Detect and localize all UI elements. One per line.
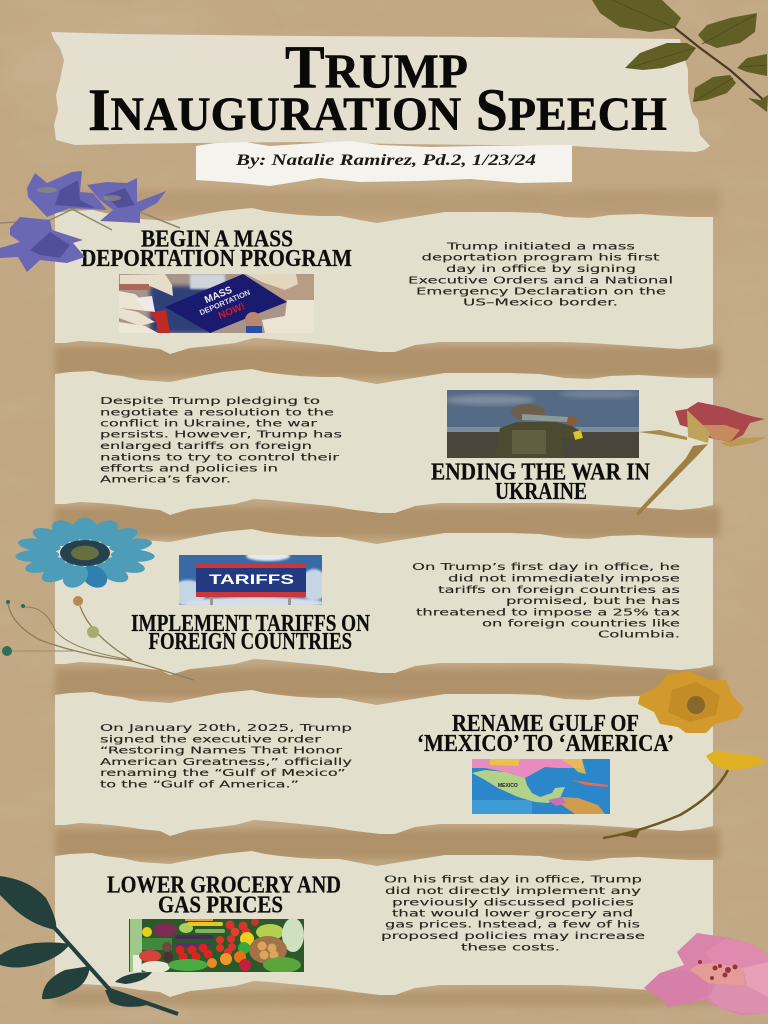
panel: Gulf of America xyxy=(55,690,713,836)
photo: vegetables xyxy=(129,918,304,973)
icon: blue daisy xyxy=(14,518,156,589)
text: tariffs: Columbia. xyxy=(598,630,680,641)
panel: grocery and gas prices xyxy=(55,851,713,997)
heading: Ukraine: UKRAINE xyxy=(495,478,587,505)
byline strip: By: Natalie Ramirez, Pd.2, 1/23/24 xyxy=(235,152,536,169)
text: grocery: proposed policies may increase xyxy=(381,931,645,942)
heading: Ukraine xyxy=(431,458,650,505)
text: tariffs: did not immediately impose xyxy=(448,574,680,585)
text: Gulf of America: American Greatness,” officially xyxy=(100,757,352,768)
photo: soldier in field xyxy=(445,390,640,458)
text: tariffs: threatened to impose a 25% tax xyxy=(416,607,680,618)
photo: mass deportation sign xyxy=(119,274,315,333)
title xyxy=(88,34,667,143)
text: mass deportation: US–Mexico border. xyxy=(463,298,618,309)
icon: dark green leaves xyxy=(0,876,178,1014)
heading: Gulf of America xyxy=(417,710,674,757)
text: mass deportation: Emergency Declaration on the xyxy=(416,287,666,298)
icon: olive leaves top right xyxy=(592,0,768,112)
heading: Gulf of America: ‘MEXICO’ TO ‘AMERICA’ xyxy=(417,730,674,757)
text: Gulf of America: signed the executive order xyxy=(100,734,323,745)
photo: mass deportation sign: DEPORTATION xyxy=(198,288,251,317)
panel: tariffs xyxy=(55,529,713,675)
text: tariffs: promised, but he has xyxy=(506,596,680,607)
icon: dried sprigs xyxy=(2,596,194,680)
text: Gulf of America: renaming the “Gulf of Mexico” xyxy=(100,768,346,779)
text: Ukraine: persists. However, Trump has xyxy=(100,430,342,441)
icon: purple flowers xyxy=(0,171,180,272)
text: grocery: that would lower grocery and xyxy=(392,908,633,919)
heading: mass deportation: BEGIN A MASS xyxy=(141,226,293,253)
photo: mass deportation sign: NOW! xyxy=(217,301,247,322)
byline strip xyxy=(196,141,572,186)
text: tariffs: tariffs on foreign countries as xyxy=(438,585,680,596)
heading: Ukraine: ENDING THE WAR IN xyxy=(431,458,650,485)
text: mass deportation xyxy=(408,241,673,309)
heading: tariffs xyxy=(131,610,370,655)
text: Ukraine: America’s favor. xyxy=(100,475,231,486)
heading: grocery xyxy=(107,872,341,918)
text: grocery: gas prices. Instead, a few of his xyxy=(385,920,640,931)
panel: ending the war in Ukraine xyxy=(55,369,713,515)
text: mass deportation: Executive Orders and a National xyxy=(408,275,673,286)
text: grocery: these costs. xyxy=(461,942,560,953)
title: INAUGURATION SPEECH xyxy=(88,77,667,143)
icon: golden flower xyxy=(638,671,744,733)
text: Ukraine: nations to try to control their xyxy=(100,452,341,463)
photo: tariffs billboard: TARIFFS xyxy=(209,571,294,587)
photo: mass deportation sign: MASS xyxy=(203,285,234,306)
text: mass deportation: Trump initiated a mass xyxy=(445,241,635,252)
text: Gulf of America: “Restoring Names That Honor xyxy=(100,746,344,757)
title: TRUMP xyxy=(285,34,468,102)
text: mass deportation: deportation program his first xyxy=(422,253,660,264)
text: Gulf of America xyxy=(100,723,352,790)
heading: grocery: LOWER GROCERY AND xyxy=(107,872,341,899)
icon: dried rose xyxy=(636,402,767,516)
text: Ukraine: negotiate a resolution to the xyxy=(100,407,334,418)
photo: map of Gulf of Mexico: MEXICO xyxy=(498,783,518,789)
heading: mass deportation xyxy=(81,226,352,272)
text: grocery xyxy=(381,875,645,953)
heading: tariffs: IMPLEMENT TARIFFS ON xyxy=(131,610,370,637)
text: grocery: did not directly implement any xyxy=(385,886,641,897)
text: Ukraine: conflict in Ukraine, the war xyxy=(100,418,319,429)
text: Gulf of America: to the “Gulf of America.” xyxy=(100,779,299,790)
icon: yellow flower with stem xyxy=(603,750,767,838)
heading: Gulf of America: RENAME GULF OF xyxy=(452,710,639,737)
heading: tariffs: FOREIGN COUNTRIES xyxy=(148,628,352,655)
text: Ukraine: Despite Trump pledging to xyxy=(100,396,320,407)
text: Ukraine: efforts and policies in xyxy=(100,463,278,474)
icon: pink flower xyxy=(644,933,768,1015)
photo: tariffs billboard xyxy=(179,555,322,605)
photo: map of Gulf of Mexico xyxy=(472,759,610,814)
title torn paper xyxy=(51,32,710,152)
text: tariffs: On Trump’s first day in office, he xyxy=(412,562,680,573)
text: mass deportation: day in office by signing xyxy=(446,264,636,275)
text: Ukraine: enlarged tariffs on foreign xyxy=(100,441,312,452)
heading: grocery: GAS PRICES xyxy=(158,891,283,918)
panel: mass deportation xyxy=(55,208,713,354)
text: Gulf of America: On January 20th, 2025, Trump xyxy=(100,723,352,734)
text: Ukraine xyxy=(100,396,342,486)
text: tariffs xyxy=(412,562,680,641)
text: tariffs: on foreign countries like xyxy=(482,619,680,630)
text: grocery: On his first day in office, Trump xyxy=(384,875,642,886)
heading: mass deportation: DEPORTATION PROGRAM xyxy=(81,245,352,272)
text: grocery: previously discussed policies xyxy=(392,897,634,908)
